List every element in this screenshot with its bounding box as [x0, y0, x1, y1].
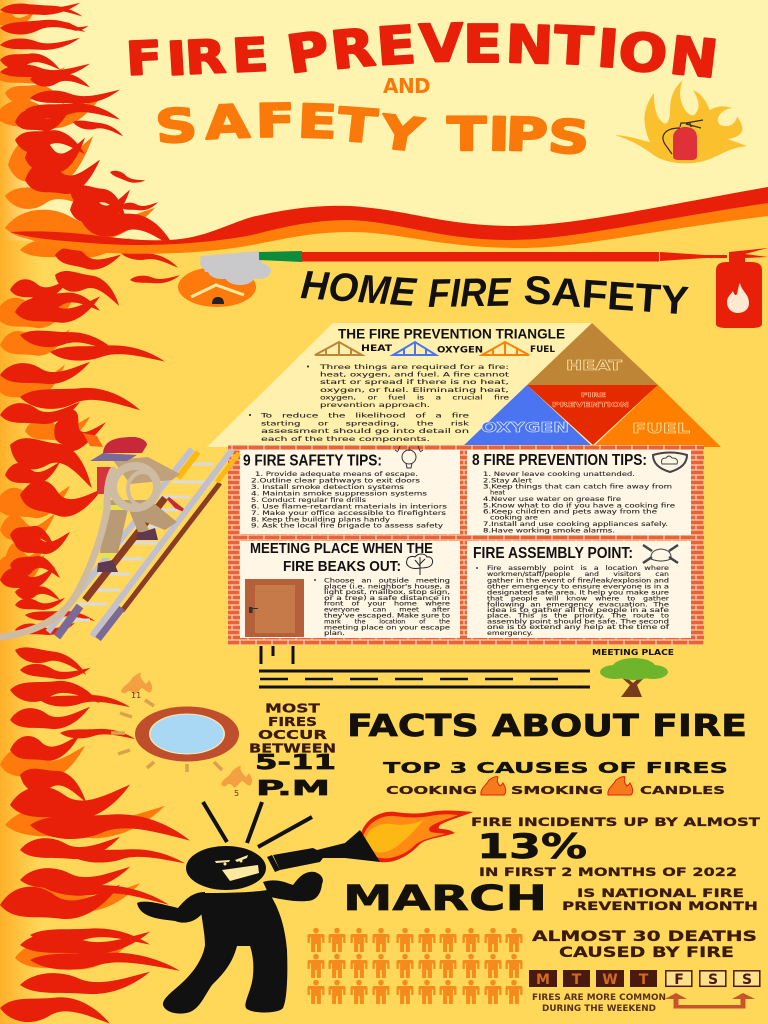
week calendar: S — [742, 972, 752, 988]
list: prevention tips — [483, 470, 675, 534]
heading: home fire safety: HOME — [299, 263, 418, 315]
stat: march: IS NATIONAL FIRE — [577, 886, 744, 900]
text block: assembly point: workmen/staff/people and visitors can — [487, 572, 670, 578]
stat: march — [343, 879, 758, 919]
title: SAFETY — [153, 95, 428, 163]
list: safety tips: 3. Install smoke detection systems — [251, 483, 405, 491]
icon: tree outline — [407, 554, 433, 575]
face — [215, 855, 259, 881]
stat: almost 30 deaths: CAUSED BY FIRE — [559, 945, 734, 961]
text block: three things: oxygen, or fuel is a crucial fire — [320, 394, 509, 402]
arrow: weekend bracket — [665, 993, 755, 1008]
text block: meeting place: light post, mailbox, stop sign, — [324, 590, 450, 596]
text: top 3 causes: CANDLES — [640, 784, 725, 797]
smoke cloud — [200, 251, 271, 285]
heading: home fire safety — [299, 263, 690, 324]
text block: meeting place: everyone can meet after — [324, 608, 451, 614]
text block: meeting place: place (i.e. neighbor's house, a — [324, 584, 450, 590]
list: prevention tips: 6.Keep children and pets away from the — [483, 508, 657, 516]
megaphone — [267, 830, 380, 872]
text block: meeting place: or a tree) a safe distance in — [324, 596, 451, 602]
triangle diagram — [462, 323, 721, 447]
text block: assembly point: gather in the event of fire/leak/explosion and — [487, 578, 670, 584]
text: top 3 causes: COOKING — [386, 784, 477, 797]
text block: meeting place: mark the location of the — [324, 620, 451, 626]
heading: home fire safety: FIRE — [427, 271, 512, 316]
text block: three things — [307, 363, 510, 409]
text block: to reduce: assessment should go into detail on — [261, 427, 469, 435]
heading: 8 fire prevention tips: 8 FIRE PREVENTION TIPS: — [472, 452, 647, 469]
title: PREVENTION — [283, 12, 721, 90]
heading: facts about fire: FACTS ABOUT FIRE — [347, 709, 747, 744]
stat: most fires occur between 5-11 pm — [249, 702, 336, 800]
text block: assembly point: emergency. — [487, 631, 533, 637]
chart: fire time ring — [111, 673, 252, 798]
brick wall frame — [228, 445, 704, 645]
list: safety tips: 1. Provide adequate means of escape. — [255, 470, 418, 478]
triangle diagram: FUEL — [632, 422, 690, 437]
heading: the fire prevention triangle: THE FIRE PREVENTION TRIANGLE — [338, 326, 565, 342]
stat: most fires occur between 5-11 pm: P.M — [256, 776, 330, 800]
text block: assembly point: that people will know where to gather — [487, 596, 670, 602]
text block: to reduce: each of the three components. — [261, 435, 430, 443]
stat: march: MARCH — [343, 879, 547, 919]
text block: meeting place: meeting place on your escape — [324, 625, 451, 631]
title — [124, 12, 721, 165]
map: route to meeting place — [259, 646, 674, 697]
stat: march: PREVENTION MONTH — [562, 899, 758, 913]
text block: assembly point: assembly point should be safe. The second — [487, 619, 670, 625]
legend: heat oxygen fuel: OXYGEN — [437, 346, 483, 356]
list: safety tips: 5. Conduct regular fire drills — [251, 496, 367, 504]
legend: heat oxygen fuel: HEAT — [361, 344, 392, 354]
firefighter — [83, 433, 183, 572]
hose and extinguisher — [259, 248, 768, 328]
list: safety tips — [251, 470, 448, 530]
stat: most fires occur between 5-11 pm: MOST — [265, 702, 321, 716]
title: AND — [383, 74, 431, 98]
text: top 3 causes: TOP 3 CAUSES OF FIRES — [383, 759, 728, 777]
week calendar: S — [708, 972, 718, 988]
list: prevention tips: 8.Have working smoke alarms. — [483, 526, 615, 534]
text block: three things: Three things are required for a fire: — [318, 363, 509, 371]
list: prevention tips: 1. Never leave cooking unattended. — [483, 470, 635, 478]
triangle diagram: HEAT — [566, 359, 622, 374]
stat: almost 30 deaths — [532, 929, 757, 961]
list: prevention tips: 2.Stay Alert — [483, 476, 533, 484]
icon: flame at 11 — [121, 673, 152, 700]
text block: three things: oxygen, or fuel. Eliminating heat, — [320, 386, 509, 394]
text block: assembly point: Fire assembly point is a location where — [487, 566, 670, 572]
label: meeting place: MEETING PLACE — [592, 648, 674, 657]
list: safety tips: 9. Ask the local fire brigade to assess safety — [251, 522, 443, 530]
text block: three things: prevention approach. — [320, 401, 430, 409]
stat: most fires occur between 5-11 pm: FIRES — [268, 715, 317, 729]
text block: assembly point: one is to extend any help at the time of — [487, 625, 671, 631]
icon: flame at 5: 5 — [234, 789, 239, 798]
text block: assembly point — [476, 566, 671, 637]
text block: three things: start or spread if there is no heat, — [320, 378, 509, 386]
hose — [0, 466, 158, 637]
text block: assembly point: place. This is the priority. The route to — [487, 614, 670, 620]
list: safety tips: 8. Keep the building plans handy — [251, 515, 390, 523]
stat: 13 percent: FIRE INCIDENTS UP BY ALMOST — [471, 815, 760, 829]
text block: assembly point: designated safe area. It help you make sure — [487, 590, 670, 596]
heading: meeting place: FIRE BEAKS OUT: — [283, 558, 401, 575]
icon: door — [245, 579, 304, 637]
heading: fire assembly point: FIRE ASSEMBLY POINT: — [473, 545, 633, 562]
stat: most fires occur between 5-11 pm: BETWEEN — [249, 742, 336, 756]
text block: meeting place: plan. — [324, 631, 345, 637]
icon: flame at 5 — [221, 766, 252, 798]
ladder — [48, 449, 239, 639]
note: fires more common on weekend: FIRES ARE MORE COMMON — [532, 993, 666, 1003]
triangle diagram: OXYGEN — [481, 421, 569, 436]
text block: meeting place — [314, 578, 451, 637]
week calendar: W — [602, 972, 618, 988]
text block: to reduce — [249, 411, 469, 443]
stat: 13 percent — [471, 815, 760, 879]
list: prevention tips: 5.Know what to do if you have a cooking fire — [483, 501, 675, 509]
list: prevention tips: 7.Install and use cooking appliances safely. — [483, 520, 668, 528]
note: fires more common on weekend — [532, 993, 666, 1014]
panel: 9 fire safety tips — [240, 446, 460, 534]
text block: assembly point: other emergency to ensure everyone is in a — [487, 584, 669, 590]
triangle diagram: PREVENTION — [552, 401, 629, 409]
title: TIPS — [447, 108, 591, 165]
text block: meeting place: they've escaped. Make sure to — [324, 614, 451, 620]
fire prevention triangle panel — [207, 323, 721, 447]
wave band — [10, 187, 768, 254]
heading: 9 fire safety tips: 9 FIRE SAFETY TIPS: — [243, 453, 382, 470]
list: prevention tips: 4.Never use water on grease fire — [483, 495, 621, 503]
title: FIRE — [124, 28, 270, 86]
stat: almost 30 deaths: ALMOST 30 DEATHS — [532, 929, 757, 945]
text: top 3 causes — [383, 759, 728, 797]
firefighter on ladder — [0, 433, 239, 639]
man with megaphone — [137, 802, 473, 1014]
icon: house — [178, 267, 256, 307]
text block: assembly point: idea is to gather all the people in a safe — [487, 608, 670, 614]
text block: meeting place: front of your home where — [324, 602, 451, 608]
list: prevention tips: 3.Keep things that can catch fire away from — [483, 483, 672, 491]
icon: shield — [653, 452, 687, 472]
stat: most fires occur between 5-11 pm: 5-11 — [255, 750, 336, 774]
panel: 8 fire prevention tips — [467, 450, 691, 535]
stat: most fires occur between 5-11 pm: OCCUR — [258, 728, 327, 742]
icon: light bulb — [395, 446, 423, 468]
legend: heat oxygen fuel: FUEL — [530, 345, 556, 355]
stat: 13 percent: 13% — [477, 827, 587, 867]
figure — [137, 846, 323, 1014]
text: top 3 causes: SMOKING — [511, 784, 603, 797]
list: prevention tips: heat — [490, 489, 505, 497]
text block: to reduce: starting or spreading, the risk — [261, 419, 469, 427]
list: safety tips: 7. Make your office accessible to firefighters — [251, 509, 447, 517]
icon: flame — [608, 777, 633, 795]
text block: three things: heat, oxygen, and fuel. A fire cannot — [320, 370, 510, 378]
triangle diagram: FIRE — [581, 392, 606, 399]
list: safety tips: 4. Maintain smoke suppression systems — [251, 490, 428, 498]
fire from megaphone — [360, 810, 473, 862]
week calendar: T — [639, 972, 649, 988]
legend: heat oxygen fuel — [315, 342, 556, 356]
text block: assembly point: following an emergency evacuation. The — [487, 602, 670, 608]
shout lines — [203, 802, 312, 847]
note: fires more common on weekend: DURING THE WEEKEND — [542, 1004, 656, 1014]
heading: home fire safety: SAFETY — [522, 268, 690, 324]
heading: meeting place: MEETING PLACE WHEN THE — [250, 540, 433, 557]
week calendar — [529, 970, 760, 988]
icon: flame at 11: 11 — [131, 691, 141, 700]
text block: to reduce: To reduce the likelihood of a fire — [259, 411, 469, 419]
heading: meeting place — [250, 540, 433, 575]
panel: fire assembly point — [467, 541, 691, 638]
week calendar: M — [536, 972, 550, 988]
text block: meeting place: Choose an outside meeting — [324, 578, 451, 584]
list: prevention tips: cooking are — [490, 514, 538, 522]
list: safety tips: 2.Outline clear pathways to exit doors — [251, 477, 421, 485]
week calendar: T — [572, 972, 582, 988]
list: safety tips: 6. Use flame-retardant materials in interiors — [251, 503, 448, 511]
icon: flame — [481, 777, 506, 795]
week calendar: F — [674, 972, 684, 988]
panel: meeting place — [240, 540, 460, 638]
flames along left edge — [0, 3, 190, 1024]
icon: assembly arrows — [643, 545, 678, 563]
stat: 13 percent: IN FIRST 2 MONTHS OF 2022 — [479, 865, 737, 879]
people pictogram: 30 figures — [308, 928, 522, 1004]
icon: flame with extinguisher — [615, 80, 747, 163]
icon: green tree — [600, 658, 668, 697]
